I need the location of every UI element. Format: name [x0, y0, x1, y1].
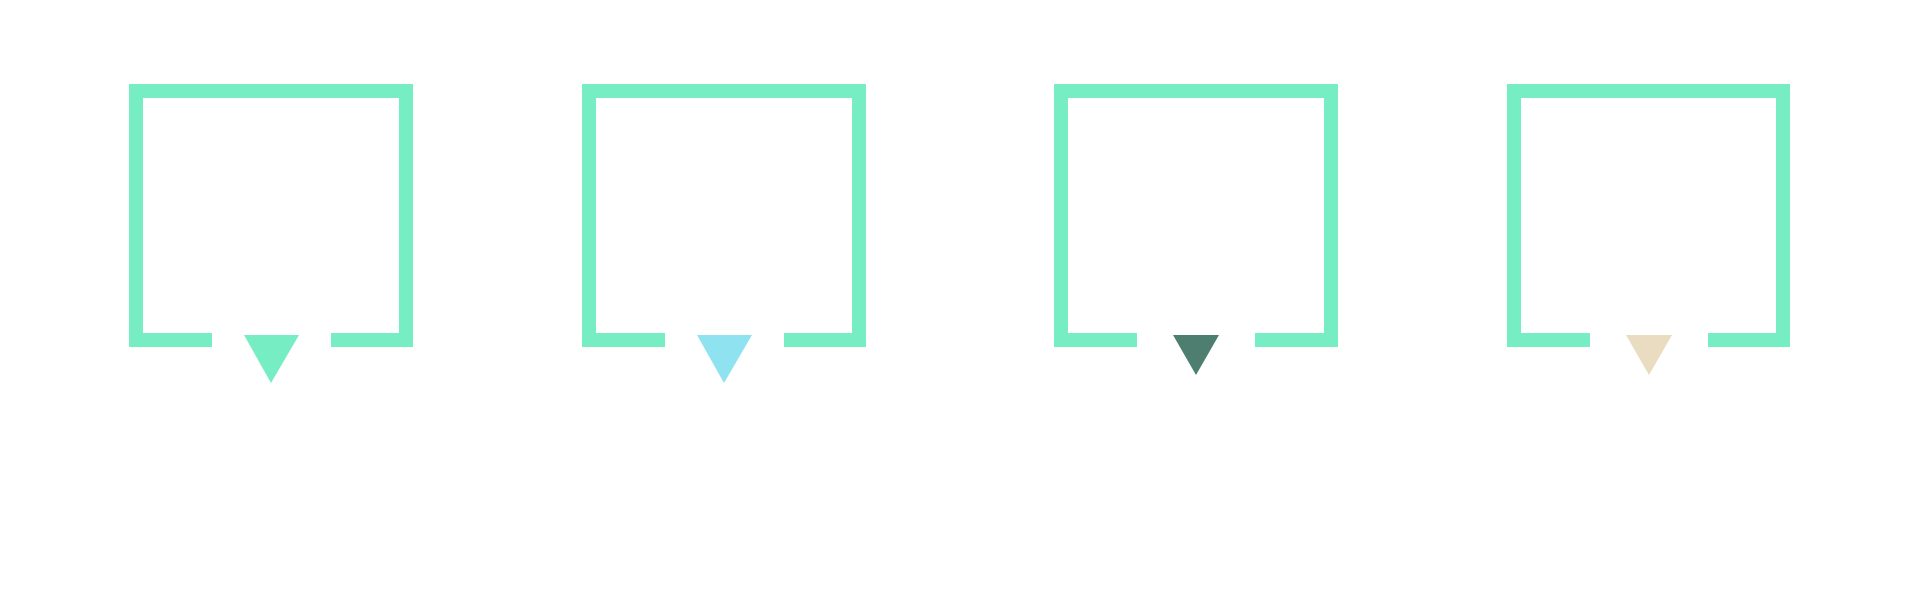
panel: frame 1	[136, 91, 406, 383]
icon: triangle marker 1	[244, 335, 299, 383]
icon: triangle marker 3	[1173, 335, 1219, 375]
panel: frame 2	[589, 91, 859, 383]
panel: frame 4	[1514, 91, 1783, 375]
icon: triangle marker 4	[1626, 335, 1672, 375]
panel: frame 3	[1061, 91, 1331, 375]
icon: triangle marker 2	[697, 335, 752, 383]
